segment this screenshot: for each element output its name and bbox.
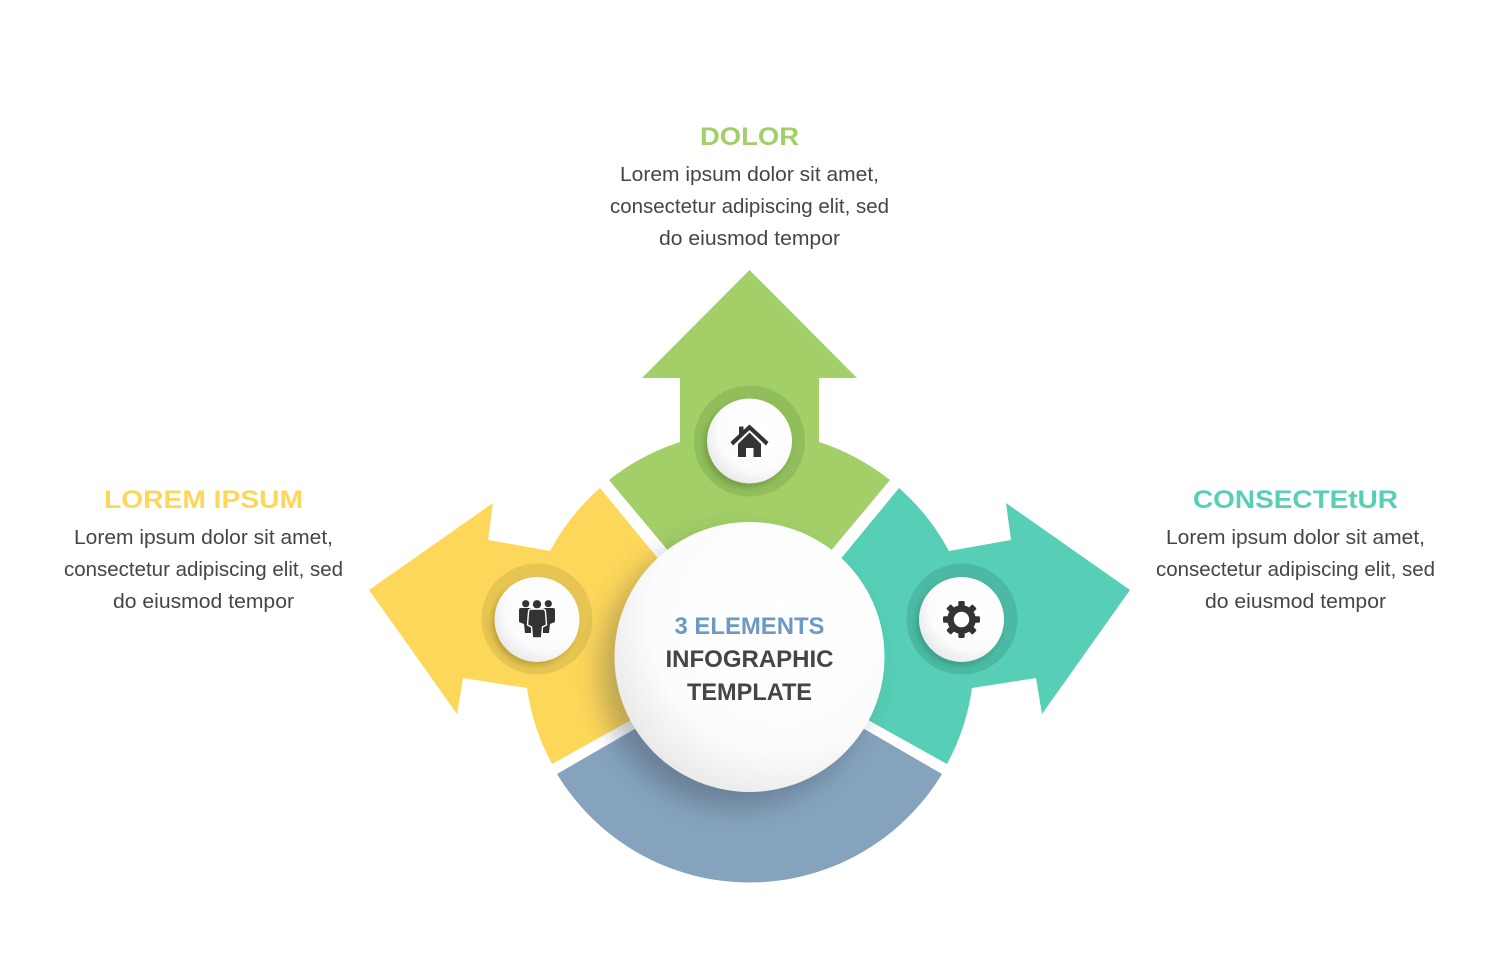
description: Lorem ipsum dolor sit amet, bbox=[620, 163, 879, 186]
heading: LOREM IPSUM bbox=[104, 486, 303, 514]
panel: center circle bbox=[600, 522, 884, 807]
arrow: teal right bbox=[834, 488, 1130, 764]
description: consectetur adipiscing elit, sed bbox=[64, 558, 343, 581]
heading: DOLOR bbox=[700, 123, 799, 151]
icon: gear bbox=[943, 601, 980, 638]
badge ring bbox=[482, 564, 592, 674]
badge button bbox=[492, 577, 580, 666]
badge ring bbox=[906, 564, 1018, 674]
badge ring bbox=[694, 386, 805, 496]
icon: people bbox=[519, 600, 555, 638]
description: do eiusmod tempor bbox=[1205, 590, 1386, 613]
badge button bbox=[704, 398, 792, 488]
arrow: green up bbox=[609, 270, 890, 559]
panel: bottom blue arc bbox=[557, 640, 942, 883]
panel: lorem ipsum bbox=[64, 486, 665, 764]
icon: house bbox=[730, 424, 768, 457]
heading: CONSECTEtUR bbox=[1193, 486, 1398, 514]
description bbox=[1156, 526, 1435, 613]
description: do eiusmod tempor bbox=[113, 590, 294, 613]
panel: consectetur bbox=[834, 486, 1435, 764]
description: Lorem ipsum dolor sit amet, bbox=[74, 526, 333, 549]
center title bbox=[666, 613, 834, 706]
center title: TEMPLATE bbox=[687, 679, 812, 706]
description bbox=[610, 163, 889, 250]
description: consectetur adipiscing elit, sed bbox=[610, 195, 889, 218]
center title: 3 ELEMENTS bbox=[674, 613, 824, 640]
center disc bbox=[614, 522, 884, 792]
center title: INFOGRAPHIC bbox=[666, 646, 834, 673]
badge button bbox=[916, 577, 1004, 666]
description: consectetur adipiscing elit, sed bbox=[1156, 558, 1435, 581]
arrow: yellow left bbox=[369, 488, 665, 764]
center shadow bbox=[600, 537, 870, 807]
description bbox=[64, 526, 343, 613]
panel: dolor bbox=[609, 123, 890, 559]
description: Lorem ipsum dolor sit amet, bbox=[1166, 526, 1425, 549]
description: do eiusmod tempor bbox=[659, 227, 840, 250]
